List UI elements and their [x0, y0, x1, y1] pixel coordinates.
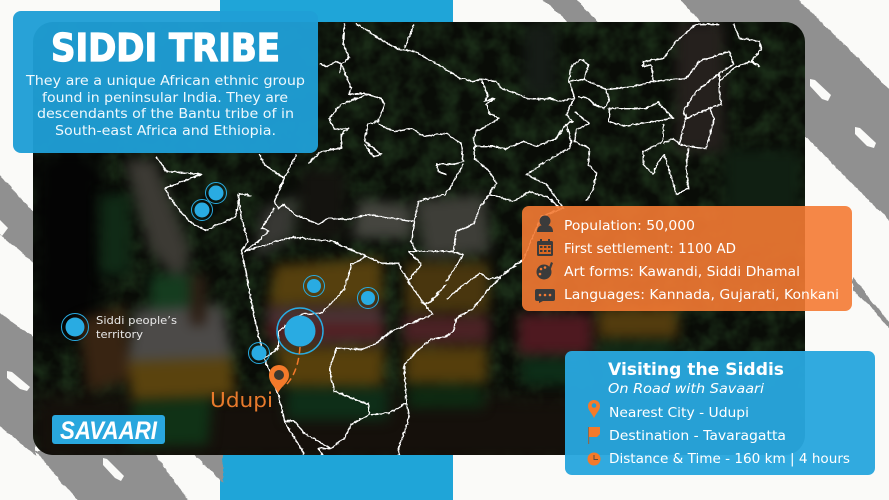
background photo: Siddi dancers in the forest — [33, 22, 805, 465]
icon: destination flag — [588, 427, 600, 444]
legend: Siddi people's territory — [62, 314, 177, 341]
icon: calendar — [537, 239, 553, 256]
intro text: descendants of the Bantu tribe of in — [37, 107, 294, 122]
logo: Savaari: SAVAARI — [60, 417, 158, 445]
panel: tribe facts — [522, 206, 852, 311]
panel: title and intro — [13, 11, 318, 153]
icon: clock — [588, 452, 600, 466]
title: SIDDI TRIBE — [51, 26, 280, 70]
route details text: Distance & Time - 160 km | 4 hours — [609, 451, 850, 467]
map of India: state boundaries — [156, 23, 761, 456]
white brush flecks — [0, 79, 876, 481]
dashed route line — [284, 347, 300, 387]
intro text: South-east Africa and Ethiopia. — [55, 124, 276, 139]
route details text: Nearest City - Udupi — [609, 405, 749, 421]
background dancers — [518, 314, 592, 354]
icon: Udupi location pin — [269, 365, 289, 393]
intro text: They are a unique African ethnic group — [25, 74, 305, 89]
icon: chat bubble — [535, 289, 555, 303]
middle dancer — [300, 170, 345, 240]
Siddi territory markers — [192, 182, 378, 364]
icon: nearest city pin — [588, 400, 600, 418]
legend: Siddi people's territory: Siddi people’s — [96, 315, 177, 327]
icon: person — [537, 216, 553, 232]
facts text: First settlement: 1100 AD — [564, 241, 736, 257]
icon: palette — [536, 262, 553, 280]
intro text — [25, 74, 305, 139]
facts text: Languages: Kannada, Gujarati, Konkani — [564, 287, 839, 303]
panel: visiting the Siddis — [565, 351, 875, 475]
facts text: Art forms: Kawandi, Siddi Dhamal — [564, 264, 800, 280]
right dancer — [415, 195, 490, 258]
left dancer — [125, 160, 190, 285]
intro text: found in peninsular India. They are — [42, 91, 288, 106]
legend: Siddi people's territory: territory — [96, 329, 143, 341]
panel heading: Visiting the Siddis — [608, 360, 784, 380]
blue vertical band — [220, 0, 453, 500]
panel subheading: On Road with Savaari — [608, 382, 764, 397]
facts text: Population: 50,000 — [564, 218, 695, 234]
route details text: Destination - Tavaragatta — [609, 428, 786, 444]
route details text — [609, 405, 850, 467]
facts text — [564, 218, 839, 303]
label: Udupi: Udupi — [210, 388, 273, 412]
